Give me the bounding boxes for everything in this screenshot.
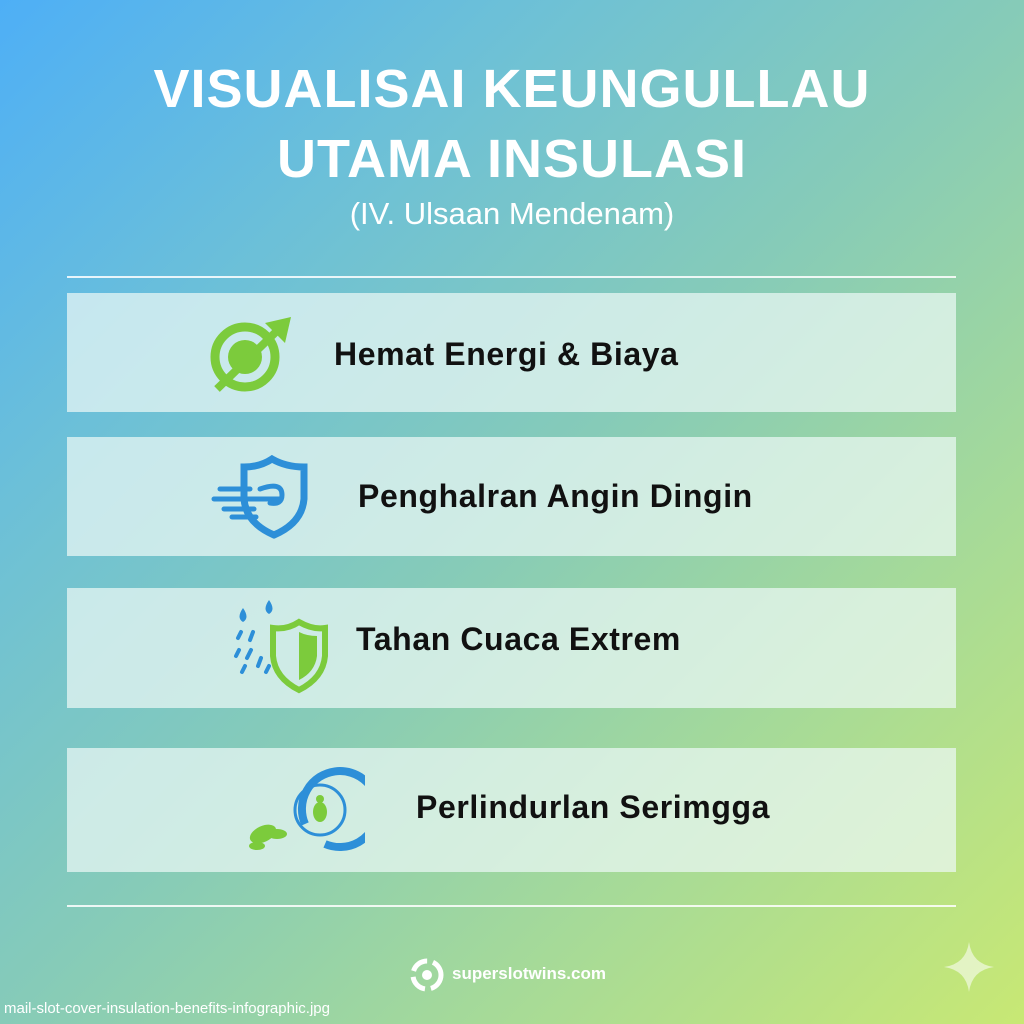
title: UTAMA INSULASI [277,129,747,189]
icon: energy arrow [210,317,291,392]
footer logo [410,958,606,992]
icon: sparkle [944,942,994,992]
brand text: superslotwins.com [452,964,606,983]
label: Penghalran Angin Dingin [358,478,753,514]
panel: angin [67,437,956,556]
panel: serangga [67,748,956,872]
icon: rain shield [234,600,328,694]
subtitle: (IV. Ulsaan Mendenam) [350,196,674,231]
label: Tahan Cuaca Extrem [356,621,681,657]
panel: cuaca [67,588,956,708]
title [153,59,870,189]
label: Perlindurlan Serimgga [416,789,770,825]
icon: wind shield [212,455,308,539]
icon: logo swirl [410,958,444,992]
label: Hemat Energi & Biaya [334,336,679,372]
icon: insect ring [249,767,365,851]
filename caption: mail-slot-cover-insulation-benefits-infographic.jpg [4,1000,330,1017]
panel: hemat energi [67,293,956,412]
title: VISUALISAI KEUNGULLAU [153,59,870,119]
